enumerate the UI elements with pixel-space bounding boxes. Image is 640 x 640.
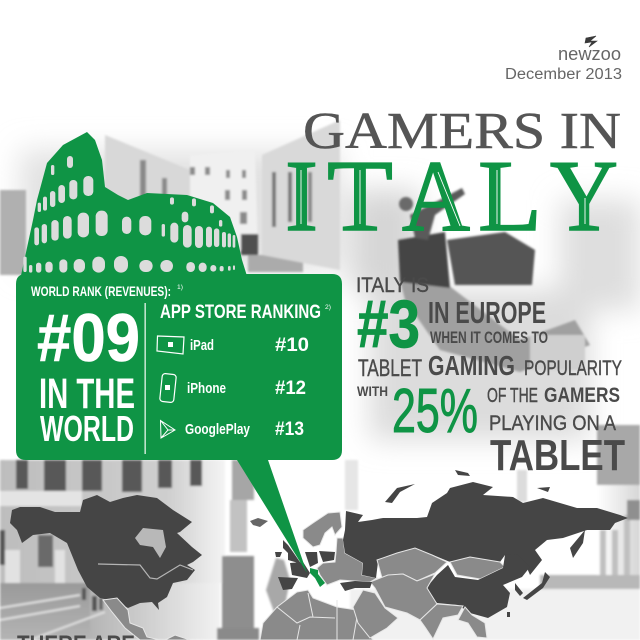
footnote 1: 1) (177, 285, 183, 291)
map: Central Asia and Middle East (370, 574, 437, 620)
map: Scandinavia (303, 512, 342, 547)
map: Latin America (103, 598, 190, 640)
map: Turkey (340, 581, 372, 591)
label: iPad: iPad (190, 337, 214, 354)
label: iPhone: iPhone (187, 380, 226, 397)
title: Italy: L (478, 140, 542, 253)
map: Kazakhstan (377, 548, 447, 581)
date: December 2013 (505, 66, 622, 83)
newzoo wordmark: newzoo (558, 44, 621, 64)
rank: Google Play: #13 (275, 419, 304, 440)
text: world rank label: WORLD RANK (REVENUES): (31, 283, 171, 299)
stat: #3: #3 (357, 286, 420, 362)
map: South East Asia (458, 607, 487, 638)
text: in Europe: IN EUROPE (428, 295, 546, 330)
icon: Google Play (160, 420, 175, 438)
text: gamers: GAMERS (544, 384, 620, 407)
footnote 2: 2) (325, 305, 331, 311)
map: Japan and Kamchatka (507, 530, 585, 617)
map: Hudson Bay area (135, 528, 166, 558)
icon: newzoo logo (585, 36, 597, 47)
map: Arctic islands (385, 470, 550, 503)
map: Eastern Europe (317, 538, 377, 585)
title: Italy: T (327, 140, 393, 253)
icon: Italy highlighted on map (310, 568, 325, 587)
text: world: WORLD (40, 408, 134, 449)
rank: iPhone: #12 (275, 378, 306, 399)
text: with: WITH (357, 383, 388, 399)
map: Russia (343, 482, 628, 578)
map: Western Europe (275, 540, 335, 590)
icon: colosseum silhouette (20, 132, 247, 280)
text: gaming: GAMING (428, 350, 515, 381)
map: world map (10, 470, 628, 640)
map: North America (10, 495, 202, 610)
map: US border (98, 564, 193, 579)
map: Iceland (250, 518, 268, 527)
text: tablet: TABLET (358, 355, 422, 382)
speech bubble with rankings (16, 274, 342, 587)
heading: app store ranking: APP STORE RANKING (160, 302, 321, 323)
text: of the: OF THE (487, 385, 538, 407)
title: Italy: A (402, 140, 470, 253)
text: in the: IN THE (39, 370, 135, 418)
rank: iPad: #10 (275, 335, 309, 356)
map: India (420, 604, 463, 639)
label: GooglePlay: GooglePlay (185, 421, 251, 438)
text: when it comes to: WHEN IT COMES TO (430, 329, 548, 347)
stat: world rank 09: #09 (37, 300, 140, 376)
map: China (427, 554, 530, 618)
stat: 25%: 25% (392, 377, 478, 446)
text: playing on a: PLAYING ON A (489, 412, 616, 435)
map: Arabian Peninsula (353, 590, 398, 638)
title: Italy (285, 140, 618, 253)
map: Africa (260, 590, 373, 640)
icon: iPad (157, 336, 184, 354)
map: Mongolia (450, 557, 505, 579)
text: Italy is: ITALY IS (356, 274, 429, 297)
title: Italy: Y (550, 140, 618, 253)
text block: tablet gaming callout (356, 274, 625, 480)
title: Italy: I (285, 140, 318, 253)
title: Gamers in: GAMERS IN (303, 103, 621, 160)
icon: iPhone (160, 373, 176, 403)
